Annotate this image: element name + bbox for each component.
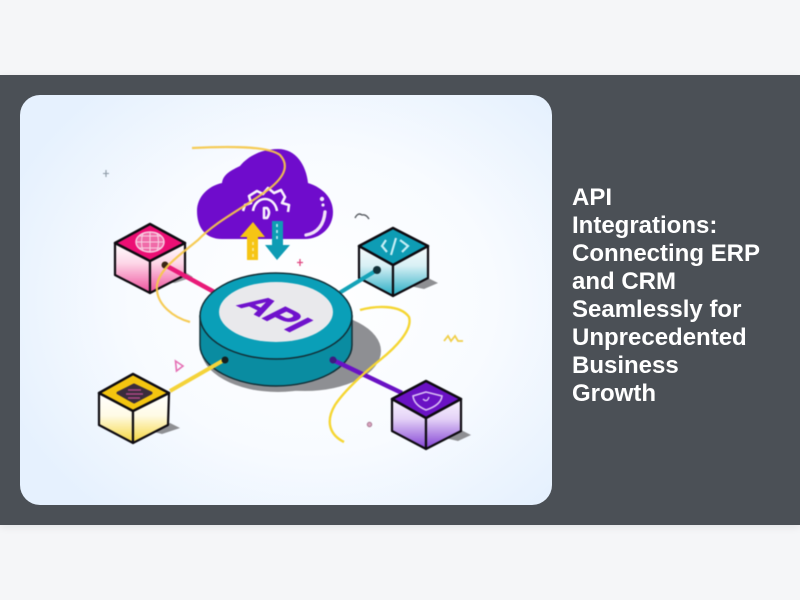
title: Growth <box>572 380 656 407</box>
cube: pink globe <box>115 224 193 293</box>
hub disc <box>200 273 352 386</box>
header band <box>0 75 800 525</box>
connector sockets <box>162 262 381 364</box>
curve: yellow lower <box>330 307 410 442</box>
mark: small dot <box>367 422 372 427</box>
mark: grey squiggle <box>355 214 369 219</box>
title: Unprecedented <box>572 324 747 351</box>
cube: purple shield <box>392 381 471 449</box>
connector: purple <box>333 360 402 393</box>
arrow: teal down <box>265 221 290 260</box>
connector: teal <box>336 270 377 295</box>
connector: yellow <box>170 360 224 391</box>
mark: pink triangle <box>176 361 183 371</box>
title: and CRM <box>572 268 676 295</box>
title: Business <box>572 352 679 379</box>
title: Connecting ERP <box>572 240 760 267</box>
title: Seamlessly for <box>572 296 741 323</box>
mark: yellow zigzag <box>444 336 463 341</box>
sparkle: grey plus <box>103 170 109 177</box>
connector: pink <box>165 265 216 293</box>
sparkle: pink plus <box>297 259 303 266</box>
hub shadow <box>201 306 381 392</box>
panel: illustration background <box>20 95 552 505</box>
icon: gear <box>243 188 289 218</box>
cube: teal code <box>359 228 438 296</box>
hub label: API <box>229 290 322 337</box>
cloud <box>197 149 333 239</box>
title: Integrations: <box>572 212 717 239</box>
arrow: yellow up <box>240 222 265 260</box>
cube: yellow chip <box>99 374 180 443</box>
title <box>572 184 760 407</box>
curve: yellow upper <box>157 147 285 322</box>
title: API <box>572 184 612 211</box>
